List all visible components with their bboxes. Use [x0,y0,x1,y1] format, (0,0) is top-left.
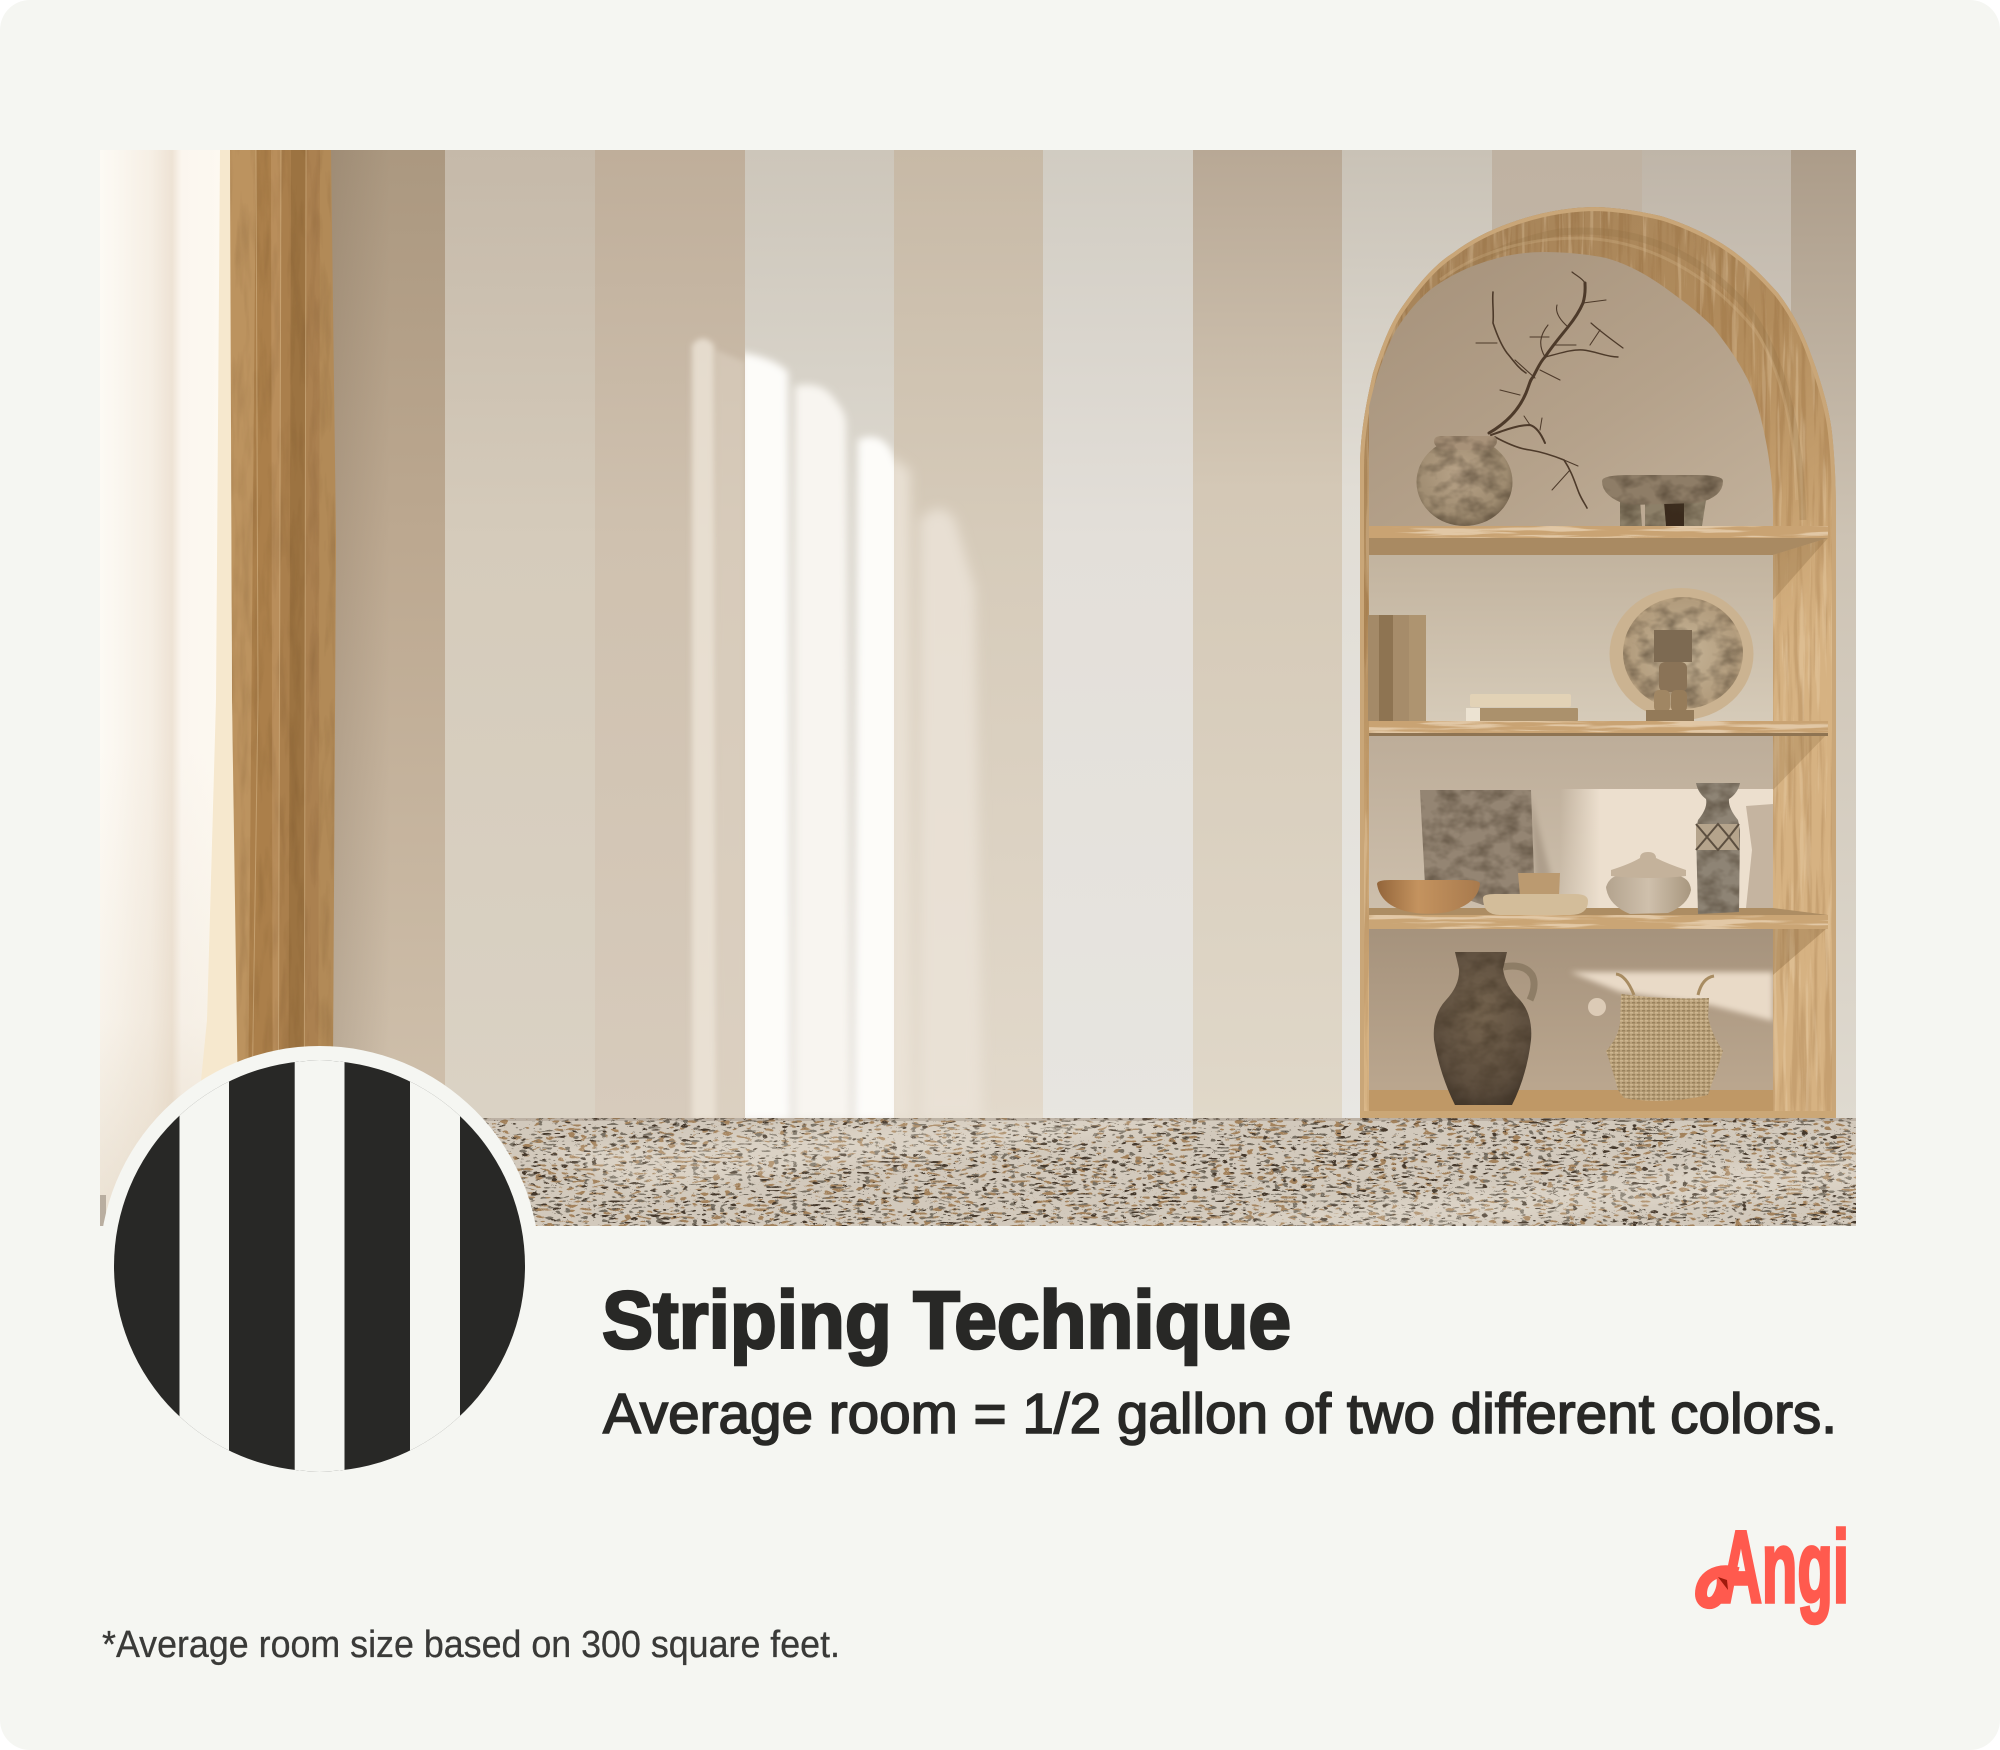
shelf 2 [1369,721,1828,736]
small cup [1518,873,1560,896]
round clay vase [1416,436,1512,526]
back wall of niche [1369,252,1773,1111]
stacked books [1466,694,1578,721]
woven basket [1606,974,1723,1101]
terrazzo floor [482,1118,1856,1226]
upright books [1368,615,1426,721]
round wooden plate [1610,588,1754,720]
niche floor [1369,1090,1773,1111]
logo: Angi: Angi [1720,1510,1849,1624]
small sun spot [1588,998,1606,1016]
sheer white curtain [100,150,240,1240]
photo: room with striped wall [100,150,1860,1240]
lidded stone pot [1606,852,1691,914]
footnote: *Average room size based on 300 square feet. [102,1624,840,1666]
sun patch on bottom bay [1570,972,1773,1021]
subtitle: Average room = 1/2 gallon of two different colors. [603,1382,1837,1446]
sun patch on third bay [1560,789,1773,909]
inner floor lip [1360,1111,1836,1118]
sunlight on wall [692,338,982,1120]
arched wooden bookcase [1355,200,1845,1125]
wooden bowl [1377,880,1480,914]
arch frame [1355,200,1845,1125]
icon halo [100,1046,540,1486]
tall patterned vase [1696,783,1740,914]
leaning square slate [1420,790,1538,905]
branch in vase [1476,272,1623,508]
footed stone bowl [1602,475,1723,526]
striped disc [110,1056,530,1476]
title: Striping Technique [602,1275,1291,1366]
slate shadow [1532,808,1552,873]
carved figurine [1646,630,1694,721]
vase shadow on third bay [1746,804,1773,908]
wall stripes [325,150,1856,1120]
shelf 3 [1369,908,1828,929]
shelf 1 [1369,526,1828,555]
logo: Angi [1701,1510,1849,1624]
circular stripe icon [100,1046,540,1486]
inner plate [1623,597,1743,709]
right side panel shadows [1773,538,1828,975]
tan pleated curtain [230,150,336,1062]
flat round dish [1483,894,1588,915]
clay jug [1434,952,1534,1105]
